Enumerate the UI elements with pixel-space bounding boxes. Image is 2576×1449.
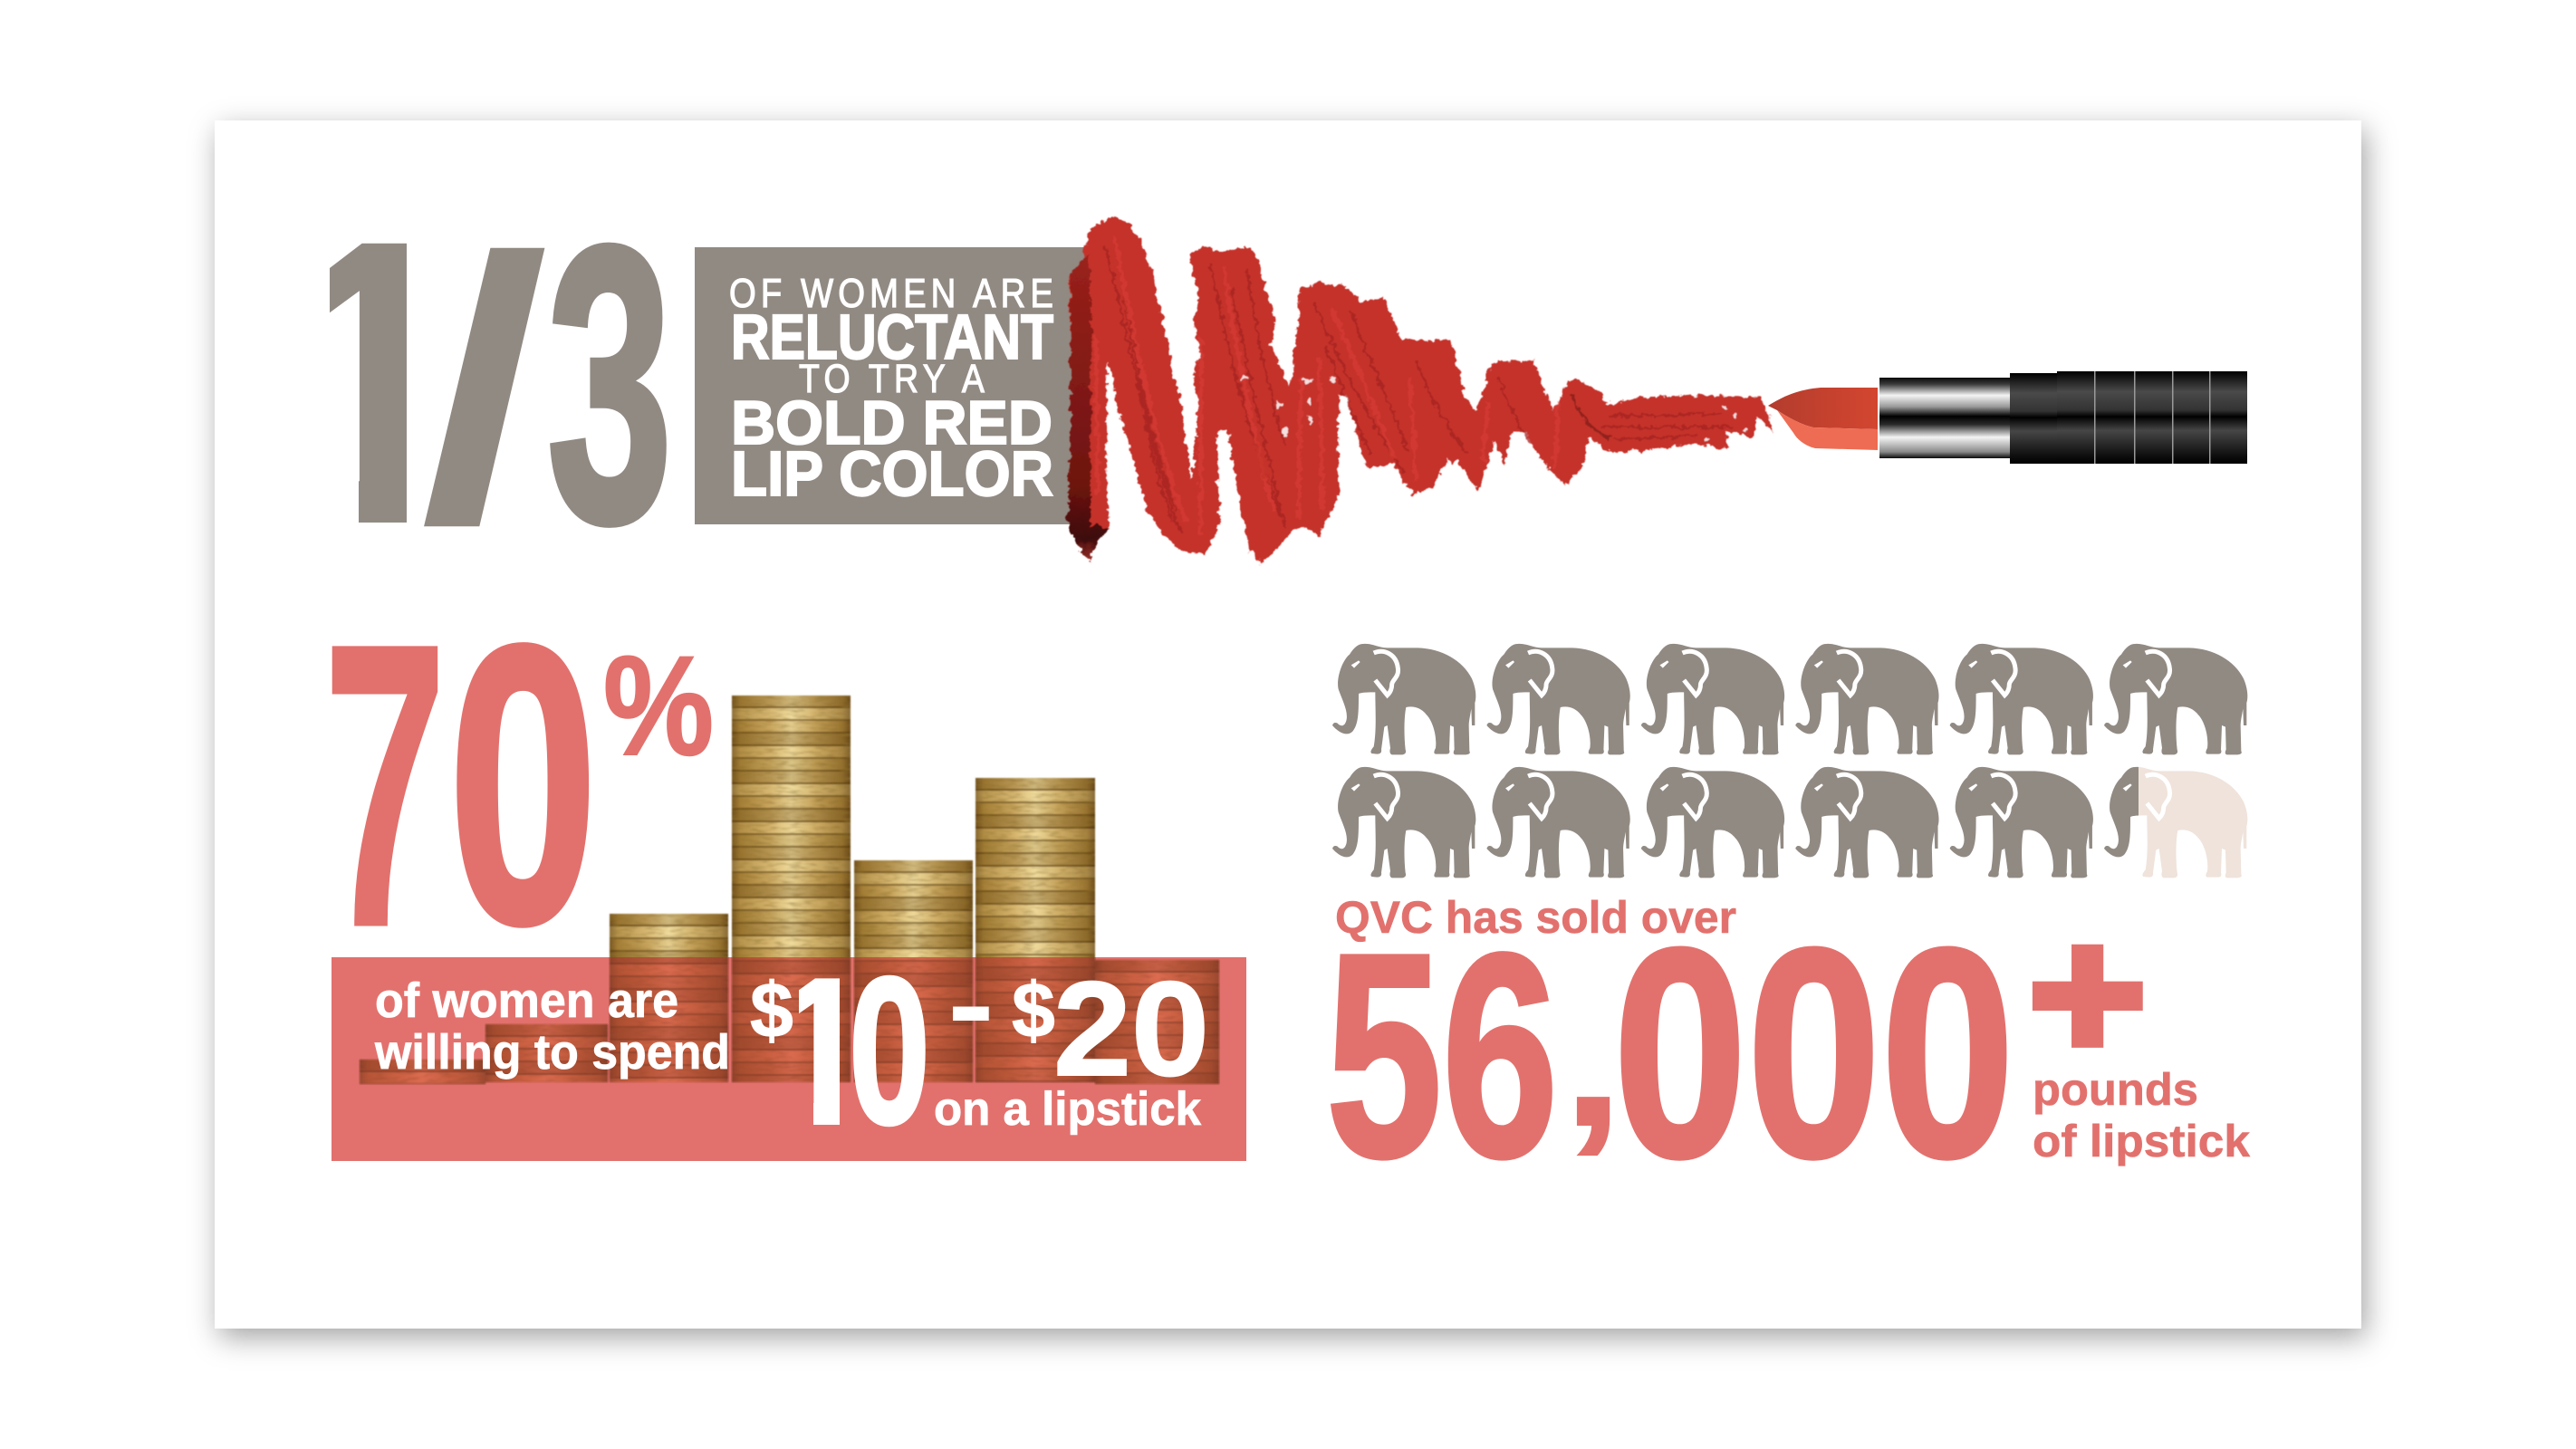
lipstick scribble — [1067, 217, 1773, 564]
heading: 56,000+: + — [2029, 890, 2146, 1098]
text: pounds of lipstick: pounds — [2033, 1064, 2198, 1115]
panel: reluctant text box — [695, 247, 1087, 524]
coin tint inside band — [360, 957, 1219, 1084]
text: price range $10 - $20: $ — [1012, 967, 1055, 1054]
text: pounds of lipstick: of lipstick — [2033, 1116, 2250, 1166]
text: on a lipstick: on a lipstick — [934, 1083, 1201, 1136]
icon row: elephants bottom — [1332, 767, 2247, 878]
heading: 56,000+: , — [1561, 951, 1625, 1167]
text: willing to spend — [374, 974, 730, 1080]
text: QVC has sold over: QVC has sold over — [1335, 892, 1736, 943]
text: willing to spend: of women are — [375, 974, 678, 1028]
heading: 1/3 numeral — [330, 243, 667, 528]
heading: 56,000+ — [1326, 887, 2146, 1219]
lipstick bullet — [1768, 388, 1878, 450]
heading: 56,000+: 56 — [1326, 893, 1558, 1217]
heading: 56,000+: 000 — [1613, 887, 2014, 1219]
heading: 70 percent: 0 — [448, 564, 598, 1005]
black case — [2010, 371, 2247, 464]
panel: reluctant text box: BOLD RED — [731, 389, 1053, 457]
text: price range $10 - $20: 20 — [1053, 955, 1209, 1104]
panel: reluctant text box: RELUCTANT — [731, 302, 1053, 372]
panel: pink spending band — [332, 957, 1246, 1161]
panel: reluctant text box: OF WOMEN ARE — [729, 270, 1053, 316]
text: price range $10 - $20: 1 — [769, 932, 876, 1170]
chart: elephant pictogram — [1332, 644, 2247, 878]
heading: 1/3 numeral: 3 — [547, 165, 672, 603]
heading: 70 percent: % — [603, 628, 714, 785]
text: willing to spend: willing to spend — [374, 1025, 730, 1080]
panel: white card — [215, 120, 2361, 1329]
text: price range $10 - $20: - — [947, 937, 995, 1070]
text: price range $10 - $20: $ — [750, 967, 793, 1054]
heading: 1/3 numeral: / — [419, 180, 551, 599]
panel: reluctant text box: LIP COLOR — [731, 438, 1053, 509]
heading: 70 percent: 7 — [323, 561, 447, 1011]
lipstick tube — [1768, 371, 2247, 464]
heading: 70 percent — [323, 561, 714, 1011]
heading: 1/3 numeral: 1 — [279, 155, 471, 609]
text: price range $10 - $20: 0 — [849, 934, 930, 1167]
text: price range $10 - $20 — [750, 974, 1205, 1127]
icon row: elephants top — [1332, 644, 2247, 754]
text: pounds of lipstick — [2033, 1064, 2250, 1166]
panel: reluctant text box: TO TRY A — [799, 357, 985, 401]
silver collar — [1879, 378, 2010, 458]
chart: stacks of coins — [360, 696, 1219, 1084]
